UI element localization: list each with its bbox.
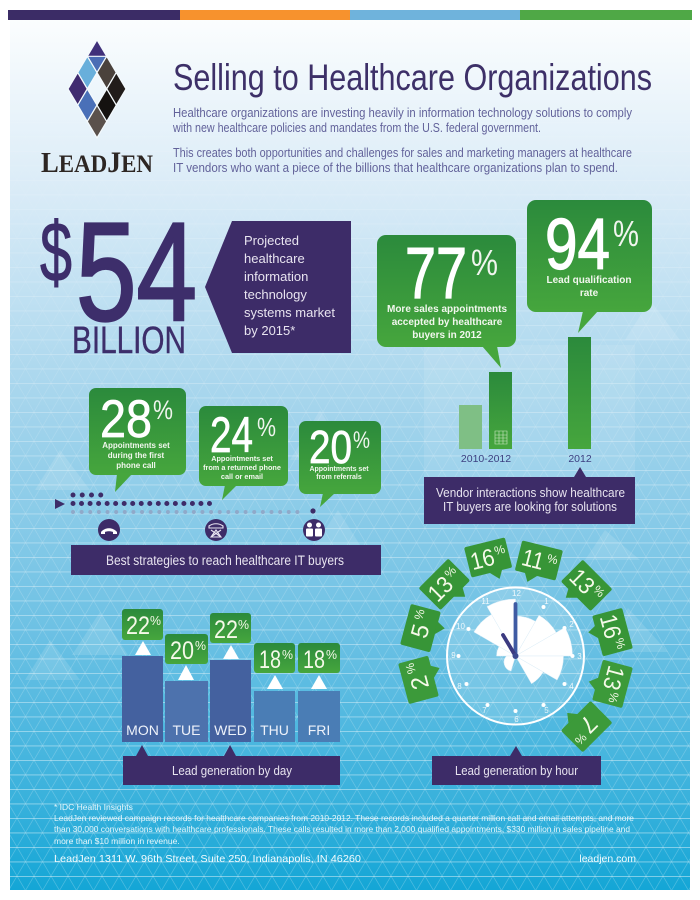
clock numerals: 7 [482, 706, 487, 715]
clock numerals: 3 [577, 652, 582, 661]
hour label: 13% (10-11) [419, 559, 476, 616]
logo: LeadJen [41, 40, 153, 179]
intro text: This creates both opportunities and challenges for sales and marketing managers at healthcare [173, 146, 632, 160]
bar: Tuesday: 20 [170, 637, 194, 665]
hour label: 5% [400, 604, 449, 654]
intro text: IT vendors who want a piece of the billions that healthcare organizations plan to spend. [173, 161, 618, 175]
bar: Friday: % [326, 647, 337, 662]
clock face [447, 588, 584, 724]
hour label: 13% (1-2) [555, 560, 612, 617]
footnotes: than 30,000 conversations with healthcare professionals. These calls resulted in more than 2,000 qualified appointments, $330 million in sales pipeline and [54, 824, 630, 834]
bar: Wednesday: % [238, 617, 249, 632]
hour label: 11% [513, 540, 563, 588]
footnotes: more than $10 million in revenue. [54, 836, 180, 846]
hour label: 13% (10-11): 13 [423, 571, 459, 607]
footnotes: * IDC Health Insights [54, 802, 133, 812]
intro text: with new healthcare policies and mandates from the U.S. federal government. [172, 121, 541, 135]
bubble: 20%: % [353, 427, 370, 454]
callout: market projection: technology [244, 287, 307, 302]
hour label: 5%: % [411, 607, 428, 621]
bar: Thursday: 18 [259, 646, 281, 674]
bar: Thursday: THU [260, 722, 289, 738]
bar: Monday: % [150, 613, 161, 628]
banner: best strategies [71, 545, 381, 575]
callout: market projection: healthcare [244, 251, 305, 266]
callout: market projection [205, 221, 351, 353]
bubble: 77%: 77 [405, 234, 467, 314]
banner: lead generation by hour [432, 746, 601, 785]
bar chart: vendor interactions: 2012 [568, 453, 592, 465]
callout: market projection: information [244, 269, 308, 284]
bar chart: lead generation by day [122, 609, 340, 742]
bubble: 77%: % [471, 242, 498, 283]
footnotes: LeadJen reviewed campaign records for healthcare companies from 2010-2012. These records included a quarter million call and email attempts, and more [54, 813, 634, 823]
wedges [474, 599, 572, 684]
clock numerals: 8 [457, 682, 462, 691]
hour label: 11%: 11 [519, 544, 547, 576]
bubble: 77%: accepted by healthcare [392, 317, 503, 328]
bubble: 24%: 24 [210, 407, 253, 463]
bar chart: vendor interactions: 2010-2012 [461, 453, 511, 465]
footer contact [54, 853, 636, 865]
hour label: 5%: 5 [406, 621, 435, 641]
bubble: 77%: buyers in 2012 [412, 330, 482, 341]
clock numerals: 4 [569, 682, 574, 691]
stat: $54 billion: 54 [76, 193, 197, 350]
bar: Friday: FRI [308, 722, 330, 738]
hour label: 2%: % [403, 661, 419, 675]
bubble: 94%: Lead qualification [546, 275, 632, 286]
hour label: 13% (1-2): % [590, 583, 608, 600]
clock chart: lead generation by hour [447, 588, 584, 724]
hour label: 2% [398, 654, 447, 704]
bar: Monday: MON [126, 722, 159, 738]
hour label: 7%: 7 [574, 710, 602, 738]
bubble: 28%: 28 [100, 390, 152, 449]
hour label: 16% (11-12) [464, 537, 514, 585]
clock numerals: 12 [512, 589, 521, 598]
bubble: 77% [377, 234, 516, 368]
hour label: 13% (10-11): % [442, 563, 459, 581]
bar chart: vendor interactions [459, 337, 592, 465]
clock numerals: 11 [481, 597, 490, 606]
callout: market projection: systems market [244, 305, 335, 320]
bubble: 28%: Appointments set [102, 441, 170, 450]
hour label: 13% (3-4): % [605, 691, 622, 705]
stat: $54 billion: BILLION [72, 320, 186, 362]
hour label: 7% [555, 695, 612, 752]
bar: Tuesday [165, 634, 208, 742]
callout: market projection: by 2015* [244, 323, 295, 338]
icon: referrals people [303, 519, 325, 541]
bar: Wednesday: 22 [214, 616, 238, 644]
top colour bar [8, 10, 692, 20]
hour label: 16% (11-12): 16 [468, 544, 497, 576]
hour label: 11%: % [546, 551, 560, 567]
clock numerals: 6 [514, 715, 519, 724]
bubble: 94%: % [613, 213, 639, 254]
hour label: 7%: % [572, 730, 589, 748]
clock numerals [451, 589, 582, 724]
clock numerals: 10 [456, 622, 465, 631]
banner: vendor interactions: IT buyers are looking for solutions [443, 499, 617, 514]
stat: $54 billion [40, 193, 197, 362]
bubble: 24%: Appointments set [211, 454, 273, 463]
bubble: 28%: during the first [108, 451, 165, 460]
bubble: 24%: % [257, 412, 276, 442]
clock hands [503, 604, 518, 659]
bar: Thursday [254, 643, 295, 742]
bar: Monday: 22 [126, 612, 150, 640]
hour label: 16% (2-3): % [612, 637, 628, 651]
clock numerals: 1 [544, 597, 549, 606]
bubble: 20%: from referrals [316, 474, 362, 481]
icon: calendar grid [495, 431, 507, 444]
stat: $54 billion: $ [40, 205, 72, 299]
banner: best strategies: Best strategies to reach healthcare IT buyers [106, 553, 344, 568]
icon: phone [98, 519, 120, 541]
bar: Thursday: % [282, 647, 293, 662]
intro text: Healthcare organizations are investing heavily in information technology solutions to comply [173, 106, 633, 120]
clock numerals: 9 [451, 651, 456, 660]
bar: Friday: 18 [303, 646, 325, 674]
hour label: 16% (2-3) [584, 608, 633, 658]
footer contact: leadjen.com [579, 853, 636, 865]
banner: vendor interactions [424, 467, 635, 524]
bar: Monday [122, 609, 163, 742]
intro text [172, 106, 633, 175]
hour label: 16% (11-12): % [493, 542, 507, 558]
banner: lead generation by day [123, 745, 340, 785]
hour label: 13% (3-4) [584, 658, 633, 708]
bar: Wednesday [210, 613, 251, 742]
hour label: 2%: 2 [405, 673, 435, 692]
dotted timeline [55, 495, 316, 514]
bubble: 28%: % [153, 395, 173, 425]
banner: lead generation by hour: Lead generation by hour [455, 763, 579, 778]
bubble: 20%: 20 [309, 421, 352, 473]
hour label: 13% (1-2): 13 [564, 564, 600, 600]
bubble: 24%: from a returned phone [203, 463, 281, 472]
bubble: 24%: call or email [221, 472, 263, 481]
bar: Friday [298, 643, 340, 742]
bubble: 20% [299, 421, 381, 507]
bubble: 77%: More sales appointments [387, 304, 507, 315]
callout: market projection: Projected [244, 233, 299, 248]
footer contact: LeadJen 1311 W. 96th Street, Suite 250, Indianapolis, IN 46260 [54, 853, 361, 865]
bubble: 20%: Appointments set [309, 466, 369, 473]
hour label: 16% (2-3): 16 [594, 612, 626, 642]
footnotes [54, 802, 634, 846]
bar: Wednesday: WED [214, 722, 247, 738]
banner: lead generation by day: Lead generation by day [172, 763, 292, 778]
bubble: 24% [199, 406, 288, 500]
bubble: 28% [89, 388, 186, 492]
clock numerals: 2 [569, 620, 574, 629]
logo wordmark: LEADJEN [41, 146, 153, 179]
bubble: 94%: 94 [545, 205, 610, 285]
hour marks [456, 605, 574, 713]
icon: logo diamond [68, 40, 126, 138]
bubble: 94%: rate [580, 288, 599, 299]
bubble: 94% [527, 200, 652, 333]
banner: vendor interactions: Vendor interactions show healthcare [436, 485, 625, 500]
icon: returned call or email [205, 519, 227, 541]
bar: Tuesday: TUE [172, 722, 200, 738]
bar: Tuesday: % [195, 638, 206, 653]
clock numerals: 5 [544, 706, 549, 715]
bubble: 28%: phone call [116, 461, 156, 470]
hour label: 13% (3-4): 13 [597, 663, 629, 693]
